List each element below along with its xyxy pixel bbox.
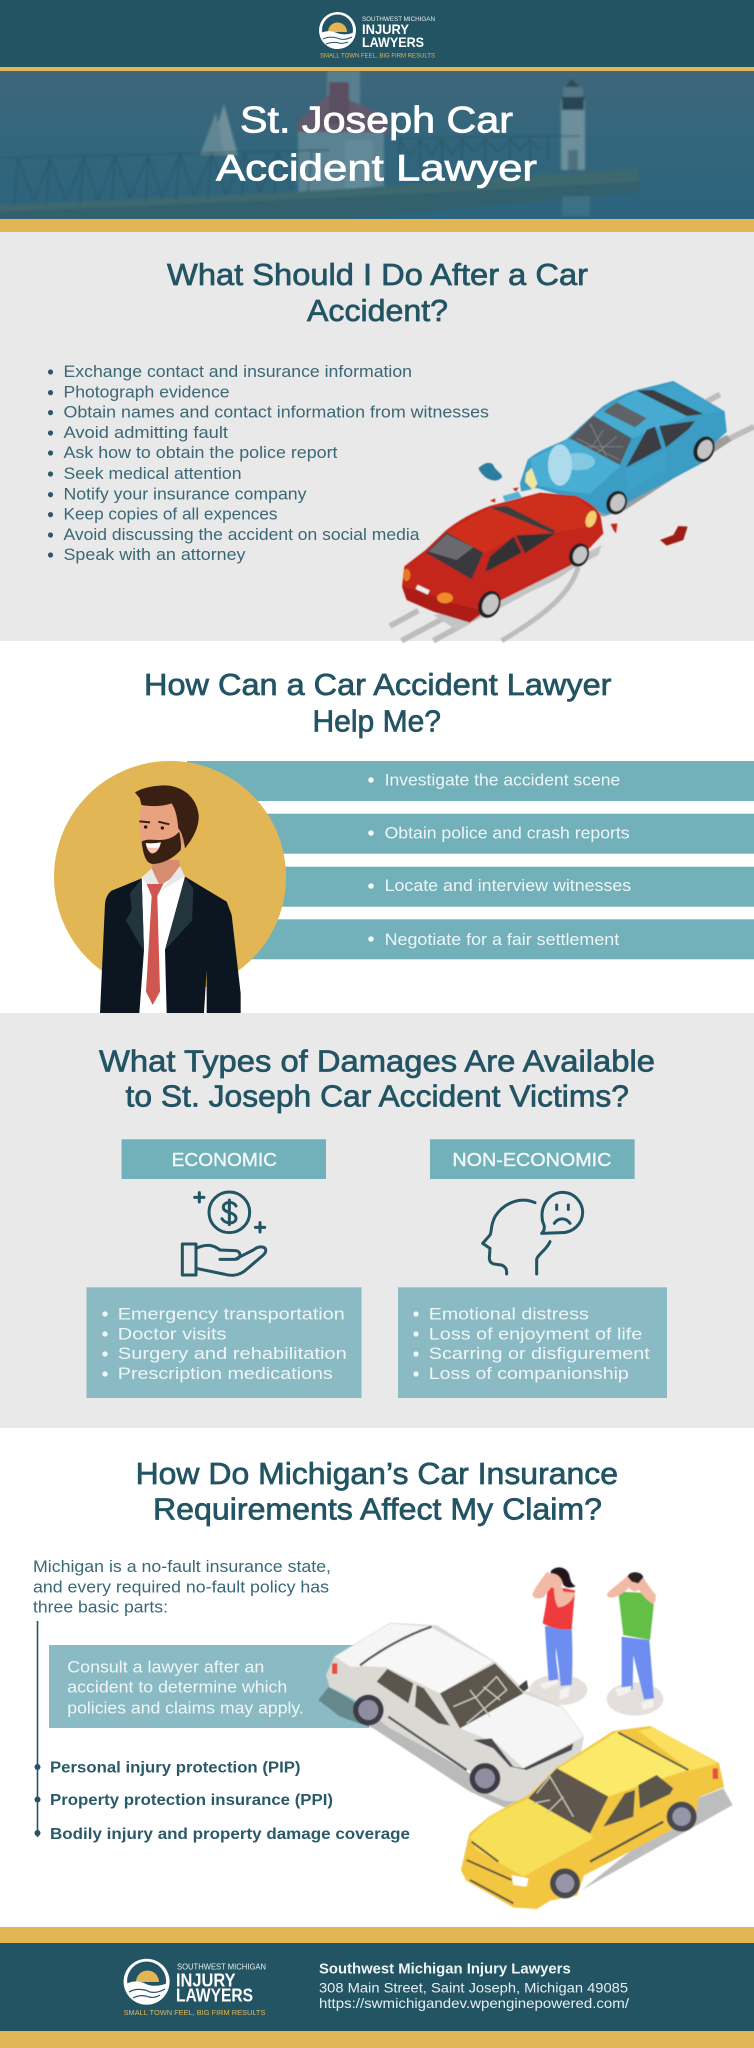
- list: steps after accident: Photograph evidence: [64, 384, 230, 402]
- timeline line with bullets: [34, 1621, 40, 1837]
- panel: economic damages list: [86, 1287, 362, 1398]
- illustration: two damaged cars and two people: [318, 1567, 733, 1913]
- red car: [403, 493, 603, 623]
- heading: types of damages: to St. Joseph Car Accident Victims?: [126, 1080, 629, 1114]
- lighthouse pier scene: [0, 71, 640, 219]
- bars: how a lawyer helps: [187, 761, 754, 959]
- yellow car: [462, 1727, 723, 1908]
- hero title: St. Joseph Car: [240, 98, 513, 140]
- list: steps after accident: Exchange contact and insurance information: [64, 363, 412, 381]
- icon: hand with dollar coin: [182, 1192, 266, 1275]
- footer contact text: [319, 1961, 629, 2011]
- panel: non-economic damages list: Loss of enjoyment of life: [429, 1325, 642, 1343]
- label: economic: [122, 1139, 326, 1179]
- footer: [0, 1927, 754, 2048]
- man: [607, 1572, 656, 1710]
- panel: non-economic damages list: Loss of companionship: [429, 1365, 629, 1383]
- intro paragraph: [33, 1558, 331, 1616]
- icon: head with sad face bubble: [483, 1192, 583, 1274]
- callout: consult a lawyer: accident to determine which: [67, 1679, 287, 1697]
- heading: types of damages: What Types of Damages Are Available: [99, 1045, 655, 1079]
- gold band: [0, 219, 754, 232]
- car shadows: [318, 1685, 523, 1808]
- intro paragraph: and every required no-fault policy has: [33, 1578, 329, 1596]
- footer logo: LAWYERS: [176, 1986, 253, 2006]
- bars: how a lawyer helps: Investigate the accident scene: [385, 772, 620, 790]
- panel: economic damages list: Surgery and rehabilitation: [118, 1345, 347, 1363]
- footer logo: SOUTHWEST MICHIGAN: [177, 1963, 266, 1972]
- person shadows: [529, 1675, 587, 1705]
- panel: non-economic damages list: Emotional distress: [429, 1305, 589, 1323]
- intro paragraph: Michigan is a no-fault insurance state,: [33, 1558, 331, 1576]
- footer logo: INJURY: [176, 1971, 236, 1991]
- header logo: LAWYERS: [362, 34, 424, 50]
- label: economic: ECONOMIC: [172, 1150, 277, 1170]
- list: steps after accident: Notify your insurance company: [64, 486, 307, 504]
- header logo: SOUTHWEST MICHIGAN: [362, 16, 435, 23]
- head: [135, 785, 199, 864]
- list: steps after accident: Avoid discussing the accident on social media: [64, 526, 420, 544]
- panel: economic damages list: Prescription medications: [118, 1365, 333, 1383]
- callout: consult a lawyer: Consult a lawyer after an: [67, 1659, 264, 1677]
- heading: how can a lawyer help: Help Me?: [312, 705, 441, 739]
- heading: michigan insurance: How Do Michigan’s Car Insurance: [136, 1457, 618, 1491]
- list: coverage parts: Personal injury protection (PIP): [50, 1760, 300, 1777]
- heading: how can a lawyer help: How Can a Car Accident Lawyer: [144, 668, 612, 702]
- bars: how a lawyer helps: Negotiate for a fair settlement: [385, 931, 620, 949]
- header logo: SMALL TOWN FEEL, BIG FIRM RESULTS: [320, 54, 435, 60]
- list: coverage parts: Bodily injury and property damage coverage: [50, 1826, 410, 1843]
- white car: [327, 1623, 583, 1800]
- list: steps after accident: Keep copies of all expences: [64, 506, 278, 524]
- woman: [533, 1567, 576, 1700]
- debris pieces: [478, 463, 688, 546]
- list: steps after accident: Ask how to obtain the police report: [64, 444, 338, 462]
- bars: how a lawyer helps: Obtain police and crash reports: [385, 824, 630, 842]
- shadows: [587, 435, 732, 517]
- heading: michigan insurance: Requirements Affect My Claim?: [153, 1492, 602, 1526]
- list: steps after accident: Avoid admitting fault: [64, 424, 228, 442]
- intro paragraph: three basic parts:: [33, 1598, 168, 1616]
- header logo: INJURY: [362, 21, 410, 37]
- hero banner with lighthouse pier photo: [0, 71, 754, 219]
- list: steps after accident: Speak with an attorney: [64, 546, 246, 564]
- footer contact text: https://swmichigandev.wpenginepowered.com/: [319, 1995, 629, 2011]
- hero title: Accident Lawyer: [216, 146, 537, 188]
- heading: michigan insurance: [136, 1457, 618, 1526]
- tire tracks: [390, 394, 754, 641]
- footer contact text: Southwest Michigan Injury Lawyers: [319, 1961, 571, 1978]
- illustration: lawyer in suit: [100, 785, 241, 1013]
- callout: consult a lawyer: policies and claims may apply.: [67, 1699, 304, 1717]
- list: coverage parts: [50, 1760, 410, 1843]
- list: steps after accident: Seek medical attention: [64, 465, 242, 483]
- footer logo: SMALL TOWN FEEL, BIG FIRM RESULTS: [124, 2008, 265, 2017]
- header bar: [0, 0, 754, 71]
- panel: economic damages list: Doctor visits: [118, 1325, 226, 1343]
- label: non-economic: [430, 1139, 635, 1179]
- list: steps after accident: [48, 363, 489, 564]
- bars: how a lawyer helps: Locate and interview witnesses: [385, 877, 631, 895]
- heading: what should I do: Accident?: [307, 294, 448, 328]
- label: non-economic: NON-ECONOMIC: [452, 1150, 611, 1170]
- panel: non-economic damages list: Scarring or disfigurement: [429, 1345, 650, 1363]
- illustration: blue and red car crash: [390, 382, 754, 641]
- footer logo: [124, 1959, 266, 2017]
- heading: how can a lawyer help: [144, 668, 612, 739]
- blue car: [521, 382, 726, 518]
- callout: consult a lawyer: [49, 1645, 369, 1728]
- heading: what should I do: What Should I Do After a Car: [167, 258, 588, 292]
- heading: types of damages: [99, 1045, 655, 1114]
- header logo: [319, 12, 435, 60]
- panel: economic damages list: Emergency transportation: [118, 1305, 345, 1323]
- list: coverage parts: Property protection insurance (PPI): [50, 1792, 333, 1809]
- gold circle: [54, 761, 286, 993]
- hero title: [216, 98, 537, 188]
- heading: what should I do: [167, 258, 588, 328]
- panel: non-economic damages list: [398, 1287, 667, 1398]
- footer contact text: 308 Main Street, Saint Joseph, Michigan 49085: [319, 1979, 628, 1995]
- list: steps after accident: Obtain names and contact information from witnesses: [64, 404, 489, 422]
